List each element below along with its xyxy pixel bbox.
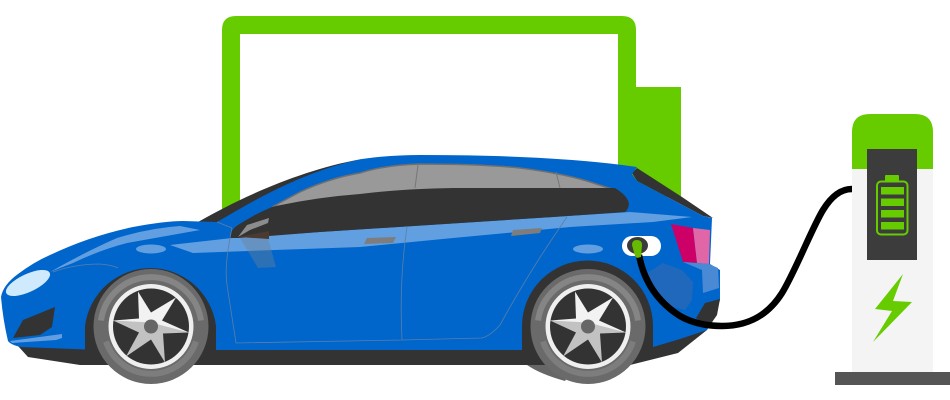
door lines <box>53 217 567 343</box>
window dark band <box>230 188 629 238</box>
door handle front <box>364 237 396 244</box>
spoiler dark edge <box>632 168 713 218</box>
side mirror base <box>238 231 269 239</box>
rear diffuser <box>696 299 720 328</box>
charge port <box>622 236 661 256</box>
station green top <box>852 114 933 169</box>
station body <box>852 160 933 373</box>
window pillars <box>415 165 560 188</box>
rear arch reflection <box>573 244 603 254</box>
tail light <box>671 224 697 263</box>
windshield dark edge <box>198 159 362 226</box>
headlight <box>2 265 54 301</box>
under-wheel tyre shade <box>527 365 575 381</box>
charge port socket <box>627 237 648 254</box>
mirror shadow <box>240 238 276 268</box>
window glass <box>272 164 615 207</box>
green battery frame <box>222 16 681 215</box>
rear panel shade <box>647 263 693 310</box>
icon: battery <box>877 175 908 234</box>
front grille <box>13 307 55 338</box>
underbody shadow <box>18 300 712 365</box>
car body <box>1 155 720 350</box>
station screen <box>867 149 917 260</box>
door handle rear <box>511 228 542 236</box>
rear bumper highlight <box>683 262 719 293</box>
rear wheel arch <box>522 261 653 352</box>
front arch reflection <box>136 244 166 254</box>
cable plug <box>632 240 642 258</box>
tail light pink section <box>693 228 710 264</box>
hood highlight <box>50 226 200 272</box>
charging station <box>835 114 950 385</box>
front wheel <box>94 269 208 384</box>
rear wheel <box>530 269 646 384</box>
body side highlight stripe <box>170 212 692 253</box>
station base <box>835 372 950 385</box>
side mirror <box>238 218 269 237</box>
front lip highlight <box>10 334 62 343</box>
icon: lightning bolt <box>873 274 912 342</box>
charging cable <box>639 189 852 326</box>
front wheel arch <box>85 268 216 352</box>
car <box>1 155 720 384</box>
